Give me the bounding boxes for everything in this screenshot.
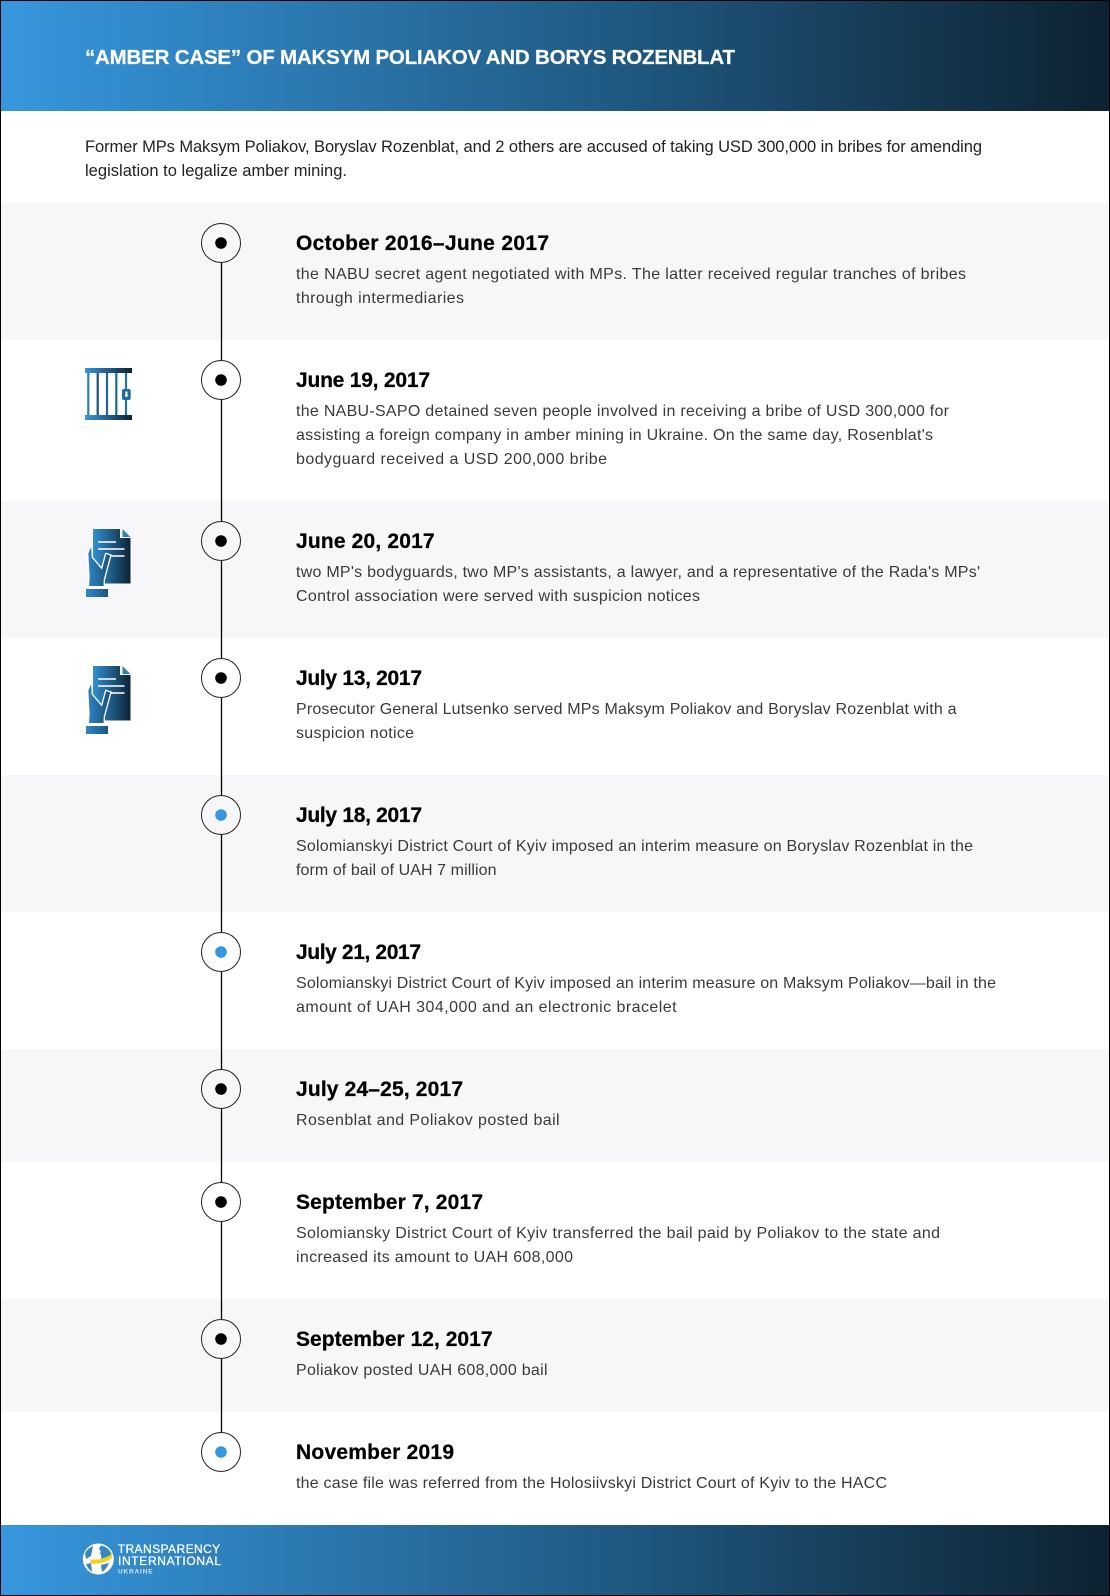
event: July 24–25, 2017 (296, 1078, 560, 1129)
event: November 2019: November 2019 (296, 1441, 454, 1464)
event: October 2016–June 2017 (296, 232, 966, 307)
event: July 18, 2017: Solomianskyi District Court of Kyiv imposed an interim measure on Boryslav Rozenblat in the (296, 838, 973, 855)
event: June 19, 2017: assisting a foreign company in amber mining in Ukraine. On the same day, Rosenblat's (296, 427, 933, 444)
event: June 20, 2017: two MP's bodyguards, two MP's assistants, a lawyer, and a representative of the Rada's MPs' (296, 564, 980, 581)
event: October 2016–June 2017: through intermediaries (296, 290, 464, 307)
icon: hand holding document 2 (86, 666, 130, 734)
marker: July 21 (202, 932, 240, 972)
event: June 19, 2017: June 19, 2017 (296, 369, 430, 392)
event: July 18, 2017: July 18, 2017 (296, 804, 422, 827)
event: July 21, 2017: Solomianskyi District Court of Kyiv imposed an interim measure on Maksym Poliakov—bail in the (296, 975, 996, 992)
logo: Transparency International Ukraine: INTERNATIONAL (118, 1554, 221, 1568)
icon: jail bars (85, 368, 132, 420)
event: June 19, 2017: the NABU-SAPO detained seven people involved in receiving a bribe of USD 300,000 for (296, 403, 950, 420)
logo: Transparency International Ukraine (83, 1542, 221, 1576)
event: June 20, 2017 (296, 530, 980, 605)
event: June 19, 2017: bodyguard received a USD 200,000 bribe (296, 451, 607, 468)
event: September 7, 2017: Solomiansky District Court of Kyiv transferred the bail paid by Poliakov to the state and (296, 1225, 940, 1242)
event: July 13, 2017: July 13, 2017 (296, 667, 422, 690)
marker: June 20 (202, 522, 240, 560)
marker: September 12 (202, 1320, 240, 1358)
intro text: Former MPs Maksym Poliakov, Boryslav Rozenblat, and 2 others are accused of taking USD 300,000 in bribes for amending (85, 138, 982, 156)
footer banner (0, 1525, 1110, 1596)
timeline vertical line (220, 243, 222, 1452)
event: November 2019 (296, 1441, 887, 1492)
event: September 7, 2017 (296, 1191, 940, 1266)
event: July 13, 2017: Prosecutor General Lutsenko served MPs Maksym Poliakov and Boryslav Rozenblat with a (296, 701, 957, 718)
event: July 21, 2017: July 21, 2017 (296, 941, 421, 964)
event: October 2016–June 2017: the NABU secret agent negotiated with MPs. The latter received regular tranches of bribes (296, 266, 966, 283)
marker: July 13 (202, 658, 240, 698)
marker: July 18 (202, 796, 240, 834)
event: July 21, 2017 (296, 941, 996, 1016)
event: July 24–25, 2017: July 24–25, 2017 (296, 1078, 463, 1101)
event: November 2019: the case file was referred from the Holosiivskyi District Court of Kyiv to the HACC (296, 1475, 887, 1492)
marker: June 19 (202, 360, 240, 400)
row backgrounds (0, 203, 1110, 1412)
intro text (85, 138, 982, 180)
event: July 18, 2017 (296, 804, 973, 879)
event: June 20, 2017: June 20, 2017 (296, 530, 435, 553)
event: October 2016–June 2017: October 2016–June 2017 (296, 232, 549, 255)
marker: October 2016 (202, 224, 240, 262)
event: June 20, 2017: Control association were served with suspicion notices (296, 588, 700, 605)
event: September 12, 2017: Poliakov posted UAH 608,000 bail (296, 1362, 548, 1379)
event: July 21, 2017: amount of UAH 304,000 and an electronic bracelet (296, 999, 677, 1016)
event: September 12, 2017: September 12, 2017 (296, 1328, 492, 1351)
logo: Transparency International Ukraine: UKRAINE (118, 1568, 153, 1576)
title: “AMBER CASE” OF MAKSYM POLIAKOV AND BORYS ROZENBLAT (85, 46, 735, 69)
event: July 24–25, 2017: Rosenblat and Poliakov posted bail (296, 1112, 560, 1129)
marker: September 7 (202, 1182, 240, 1222)
logo: Transparency International Ukraine: TRANSPARENCY (118, 1542, 220, 1556)
event: September 12, 2017 (296, 1328, 548, 1379)
icon: hand holding document (86, 529, 130, 597)
header banner (0, 0, 1110, 111)
event: June 19, 2017 (296, 369, 950, 468)
event: September 7, 2017: increased its amount to UAH 608,000 (296, 1249, 573, 1266)
marker: July 24–25 (202, 1070, 240, 1108)
event: July 13, 2017: suspicion notice (296, 725, 414, 742)
event: September 7, 2017: September 7, 2017 (296, 1191, 483, 1214)
marker: November 2019 (202, 1432, 240, 1472)
event: July 13, 2017 (296, 667, 957, 742)
event: July 18, 2017: form of bail of UAH 7 million (296, 862, 496, 879)
intro text: legislation to legalize amber mining. (85, 162, 347, 180)
